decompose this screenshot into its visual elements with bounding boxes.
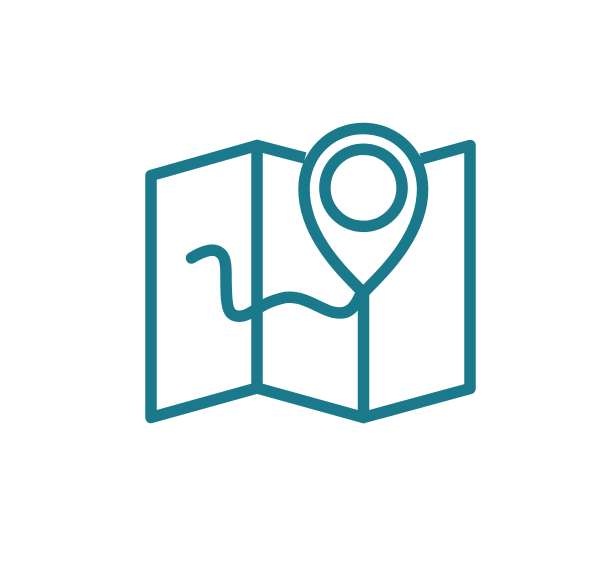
route line bbox=[192, 250, 362, 316]
map outline bbox=[151, 146, 470, 418]
location pin outer bbox=[304, 128, 423, 293]
location pin inner circle bbox=[325, 149, 402, 226]
map fold right bbox=[358, 293, 369, 418]
map fold left bbox=[251, 146, 263, 388]
